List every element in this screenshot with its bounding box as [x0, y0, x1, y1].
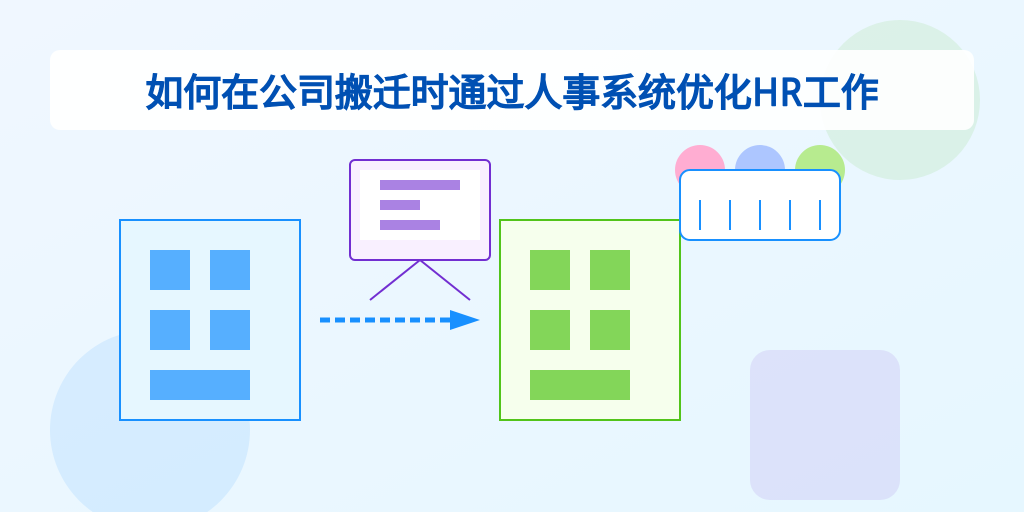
icon: HR system screen on stand — [350, 160, 490, 300]
decorative rounded square: bottom right purple — [750, 350, 900, 500]
old office building — [120, 220, 300, 420]
title banner — [50, 50, 974, 130]
card: schedule ruler — [680, 170, 840, 240]
new office building — [500, 220, 680, 420]
title: 如何在公司搬迁时通过人事系统优化HR工作 — [145, 73, 879, 112]
icon: people circles — [675, 145, 845, 195]
arrow: relocation — [320, 310, 480, 330]
decorative circle: top right green — [820, 20, 980, 180]
decorative circle: bottom left blue — [50, 330, 250, 512]
